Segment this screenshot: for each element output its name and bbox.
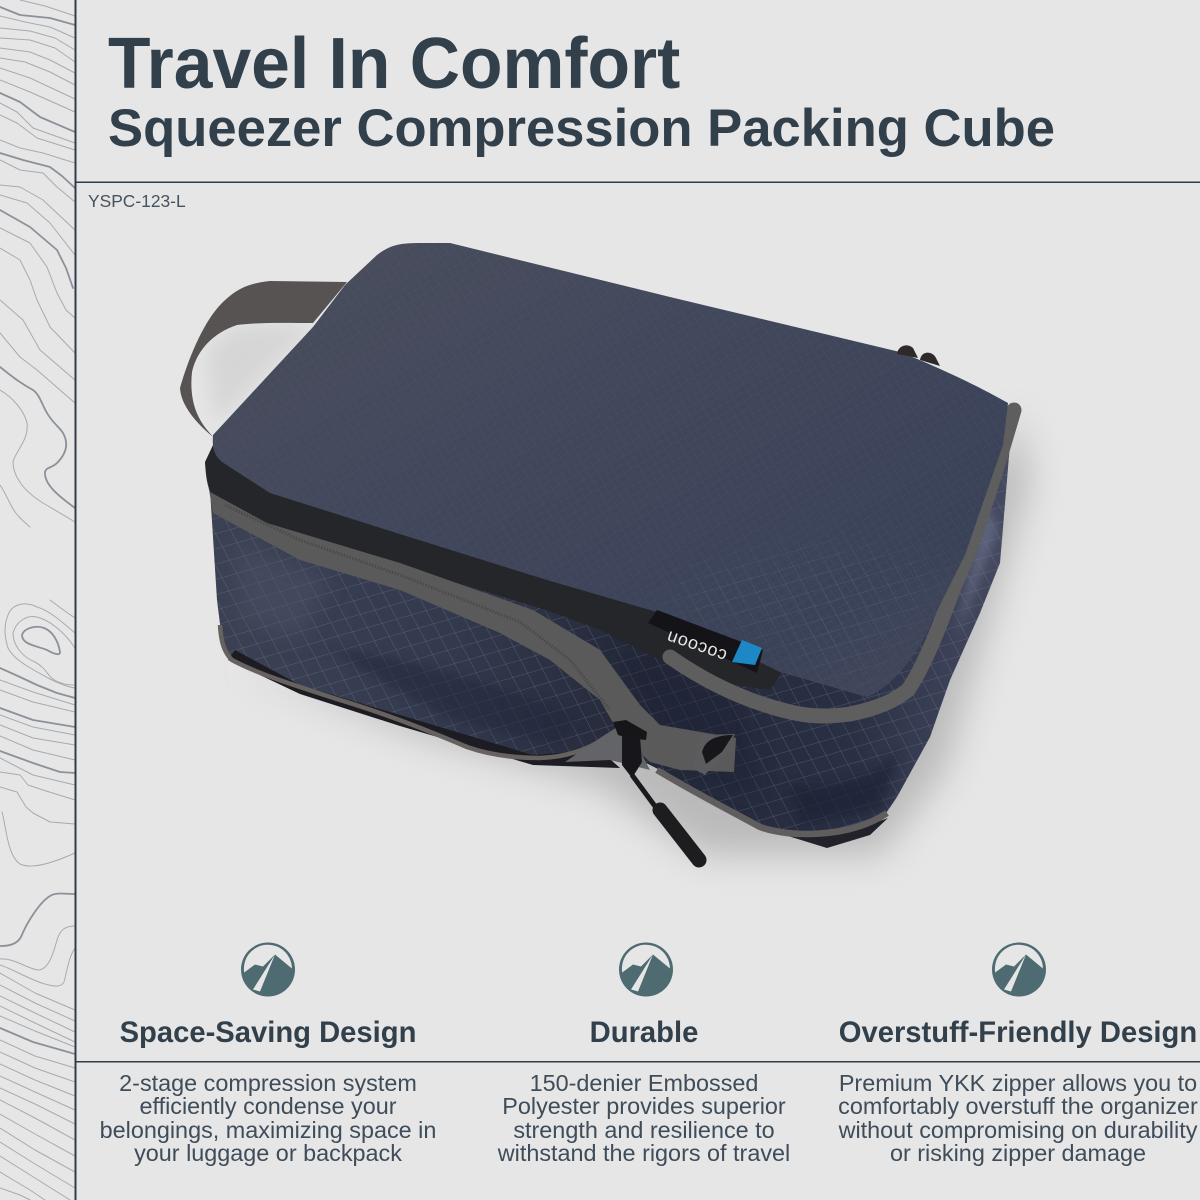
- topographic contour pattern: [0, 0, 75, 1200]
- description: comfortably overstuff the organizer: [838, 1093, 1198, 1119]
- top zipper pulls: [897, 345, 940, 366]
- product photo: packing cube: [180, 243, 1030, 860]
- lower compression zipper: [220, 625, 888, 848]
- cube side fabric: [210, 420, 1012, 838]
- description: [100, 1070, 436, 1166]
- description: or risking zipper damage: [890, 1140, 1146, 1166]
- description: without compromising on durability: [838, 1117, 1198, 1143]
- title: Travel In Comfort: [108, 24, 680, 104]
- feature: Space-Saving Design: [100, 942, 436, 1166]
- header divider: [75, 182, 1200, 183]
- brand name: cocoon: [664, 627, 729, 666]
- description: withstand the rigors of travel: [497, 1140, 790, 1166]
- main zipper grey tape: [207, 478, 736, 772]
- main zipper black coil: [205, 445, 790, 690]
- description: 2-stage compression system: [119, 1070, 417, 1096]
- description: [497, 1070, 790, 1166]
- icon: mountain: [241, 942, 295, 996]
- carry handle: [180, 281, 347, 437]
- zipper pull: [613, 720, 699, 860]
- features divider: [75, 1061, 1200, 1062]
- description: Polyester provides superior: [502, 1093, 786, 1119]
- cast shadow: [205, 322, 1030, 855]
- side loop tab: [692, 734, 735, 775]
- heading: Durable: [590, 1017, 698, 1049]
- description: [838, 1070, 1198, 1166]
- blue tag: [732, 640, 762, 665]
- description: belongings, maximizing space in: [100, 1117, 436, 1143]
- grey zipper tape right: [670, 410, 1014, 716]
- subtitle: Squeezer Compression Packing Cube: [108, 99, 1055, 158]
- description: Premium YKK zipper allows you to: [839, 1070, 1197, 1096]
- heading: Space-Saving Design: [120, 1017, 416, 1049]
- cube top panel: [213, 243, 1008, 700]
- description: efficiently condense your: [139, 1093, 397, 1119]
- feature: Durable: [497, 942, 790, 1166]
- feature: Overstuff-Friendly Design: [838, 942, 1198, 1166]
- icon: mountain: [619, 942, 673, 996]
- heading: Overstuff-Friendly Design: [839, 1017, 1197, 1049]
- product code: YSPC-123-L: [88, 191, 186, 211]
- description: strength and resilience to: [513, 1117, 775, 1143]
- cocoon brand label: [648, 610, 763, 673]
- vertical divider: [74, 0, 76, 1200]
- icon: mountain: [992, 942, 1046, 996]
- description: 150-denier Embossed: [530, 1070, 758, 1096]
- description: your luggage or backpack: [134, 1140, 402, 1166]
